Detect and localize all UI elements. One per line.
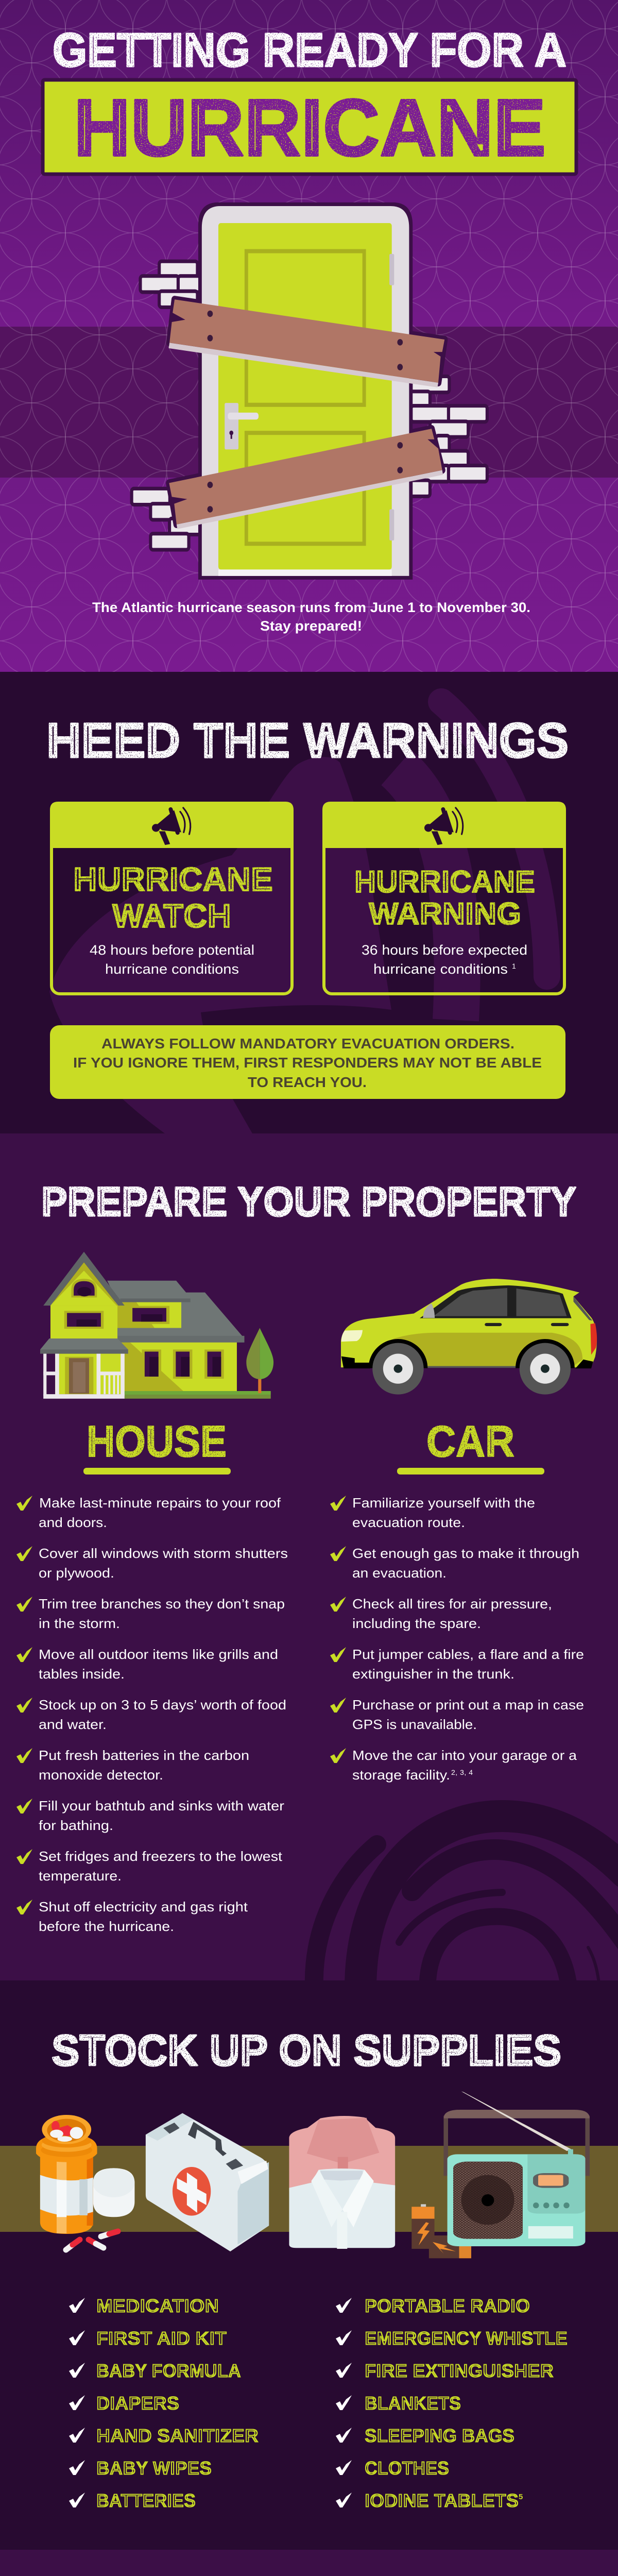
heading: PREPARE YOUR PROPERTY	[41, 1179, 576, 1225]
checklist: house: Trim tree branches so they don’t snap	[39, 1596, 285, 1612]
checklist: house: Shut off electricity and gas right	[39, 1899, 248, 1914]
checklist: supplies right: FIRE EXTINGUISHER	[365, 2360, 554, 2381]
checklist: car: an evacuation.	[352, 1565, 447, 1581]
checklist: house: Cover all windows with storm shutters	[39, 1546, 288, 1561]
illustration: car	[341, 1279, 597, 1395]
checklist: car: Familiarize yourself with the	[352, 1495, 535, 1511]
checklist: house: Fill your bathtub and sinks with water	[39, 1798, 284, 1814]
panel: stock up on supplies	[0, 1980, 618, 2550]
card title: WATCH	[112, 897, 231, 935]
checklist: house: in the storm.	[39, 1616, 120, 1631]
card text: hurricane conditions	[105, 961, 239, 977]
season text: Stay prepared!	[260, 618, 362, 634]
card text: 36 hours before expected	[362, 942, 527, 958]
title line: GETTING READY FOR A	[53, 23, 566, 77]
checklist: car: Move the car into your garage or a	[352, 1748, 577, 1763]
column heading: car: CAR	[426, 1417, 514, 1466]
panel: other tips	[0, 2550, 618, 2576]
illustration: house	[40, 1252, 273, 1399]
checklist: house: before the hurricane.	[39, 1919, 174, 1934]
card text	[90, 942, 254, 977]
checklist: car: 2, 3, 4	[451, 1768, 473, 1776]
checklist: house: monoxide detector.	[39, 1767, 163, 1783]
icon: megaphone	[424, 807, 463, 845]
card title	[73, 860, 273, 935]
icon: first aid kit	[146, 2113, 269, 2251]
checklist: car: extinguisher in the trunk.	[352, 1666, 514, 1682]
checklist: supplies right: IODINE TABLETS	[365, 2490, 519, 2511]
checklist: supplies left: FIRST AID KIT	[96, 2328, 227, 2349]
checklist: supplies right: EMERGENCY WHISTLE	[365, 2328, 568, 2349]
card: hurricane warning	[322, 802, 566, 994]
checklist: car: Put jumper cables, a flare and a fire	[352, 1647, 584, 1662]
callout: evacuation orders: ALWAYS FOLLOW MANDATORY EVACUATION ORDERS.	[101, 1036, 514, 1052]
title banner: HURRICANE	[74, 83, 546, 173]
card title: HURRICANE	[354, 865, 535, 899]
icon: pill bottle and capsules	[36, 2115, 134, 2250]
icon: folded shirts	[289, 2116, 395, 2249]
column heading: house: HOUSE	[87, 1417, 227, 1466]
column heading: car	[397, 1417, 544, 1475]
callout: evacuation orders	[50, 1025, 565, 1099]
icon: radio	[443, 2091, 590, 2246]
checklist: supplies left	[69, 2295, 259, 2511]
checklist: supplies right	[336, 2295, 568, 2511]
checklist: house: or plywood.	[39, 1565, 114, 1581]
checklist: house: for bathing.	[39, 1818, 113, 1833]
checklist: house: Set fridges and freezers to the lowest	[39, 1849, 283, 1864]
panel: prepare your property	[0, 1133, 618, 1989]
checklist: car: storage facility.	[352, 1767, 450, 1783]
checklist: house: and water.	[39, 1717, 107, 1732]
checklist: house: temperature.	[39, 1868, 122, 1884]
checklist: car: including the spare.	[352, 1616, 481, 1631]
checklist: supplies left: BABY WIPES	[96, 2458, 212, 2479]
checklist: supplies left: HAND SANITIZER	[96, 2425, 259, 2446]
checklist: house: Put fresh batteries in the carbon	[39, 1748, 249, 1763]
card text: hurricane conditions	[373, 961, 508, 977]
card text: 1	[512, 962, 516, 970]
checklist: supplies right: SLEEPING BAGS	[365, 2425, 514, 2446]
panel: hero	[0, 0, 618, 672]
checklist: supplies left: MEDICATION	[96, 2295, 219, 2316]
card title: HURRICANE	[73, 860, 273, 898]
card: hurricane watch	[50, 802, 294, 994]
callout: evacuation orders: IF YOU IGNORE THEM, FIRST RESPONDERS MAY NOT BE ABLE	[73, 1055, 542, 1071]
card text: 48 hours before potential	[90, 942, 254, 958]
checklist: car	[330, 1495, 584, 1783]
checklist: car: GPS is unavailable.	[352, 1717, 477, 1732]
checklist: car: Check all tires for air pressure,	[352, 1596, 552, 1612]
checklist: supplies right: 5	[519, 2493, 523, 2501]
checklist: supplies right: PORTABLE RADIO	[365, 2295, 530, 2316]
checklist: house: tables inside.	[39, 1666, 125, 1682]
checklist: supplies left: BABY FORMULA	[96, 2360, 241, 2381]
callout: evacuation orders: TO REACH YOU.	[248, 1074, 367, 1090]
season text	[92, 600, 530, 634]
checklist: supplies right: BLANKETS	[365, 2393, 461, 2414]
checklist: car: evacuation route.	[352, 1515, 465, 1530]
panel: heed the warnings	[48, 688, 568, 1133]
checklist: supplies left: BATTERIES	[96, 2490, 196, 2511]
checklist: house: Stock up on 3 to 5 days’ worth of food	[39, 1697, 286, 1713]
card text	[362, 942, 527, 977]
checklist: car: Purchase or print out a map in case	[352, 1697, 584, 1713]
illustration: supplies	[36, 2091, 590, 2258]
card title: WARNING	[369, 896, 521, 931]
checklist: supplies right: CLOTHES	[365, 2458, 449, 2479]
card title	[354, 865, 535, 931]
checklist: car: Get enough gas to make it through	[352, 1546, 579, 1561]
illustration: boarded-up door	[133, 202, 486, 580]
checklist: house: Move all outdoor items like grills and	[39, 1647, 278, 1662]
heading: STOCK UP ON SUPPLIES	[52, 2026, 561, 2075]
heading: HEED THE WARNINGS	[46, 713, 569, 768]
checklist: supplies left: DIAPERS	[96, 2393, 179, 2414]
icon: batteries	[411, 2204, 471, 2258]
checklist: house: and doors.	[39, 1515, 107, 1530]
icon: megaphone	[152, 807, 191, 845]
checklist: house	[16, 1495, 288, 1934]
checklist: house: Make last-minute repairs to your roof	[39, 1495, 281, 1511]
season text: The Atlantic hurricane season runs from June 1 to November 30.	[92, 600, 530, 615]
